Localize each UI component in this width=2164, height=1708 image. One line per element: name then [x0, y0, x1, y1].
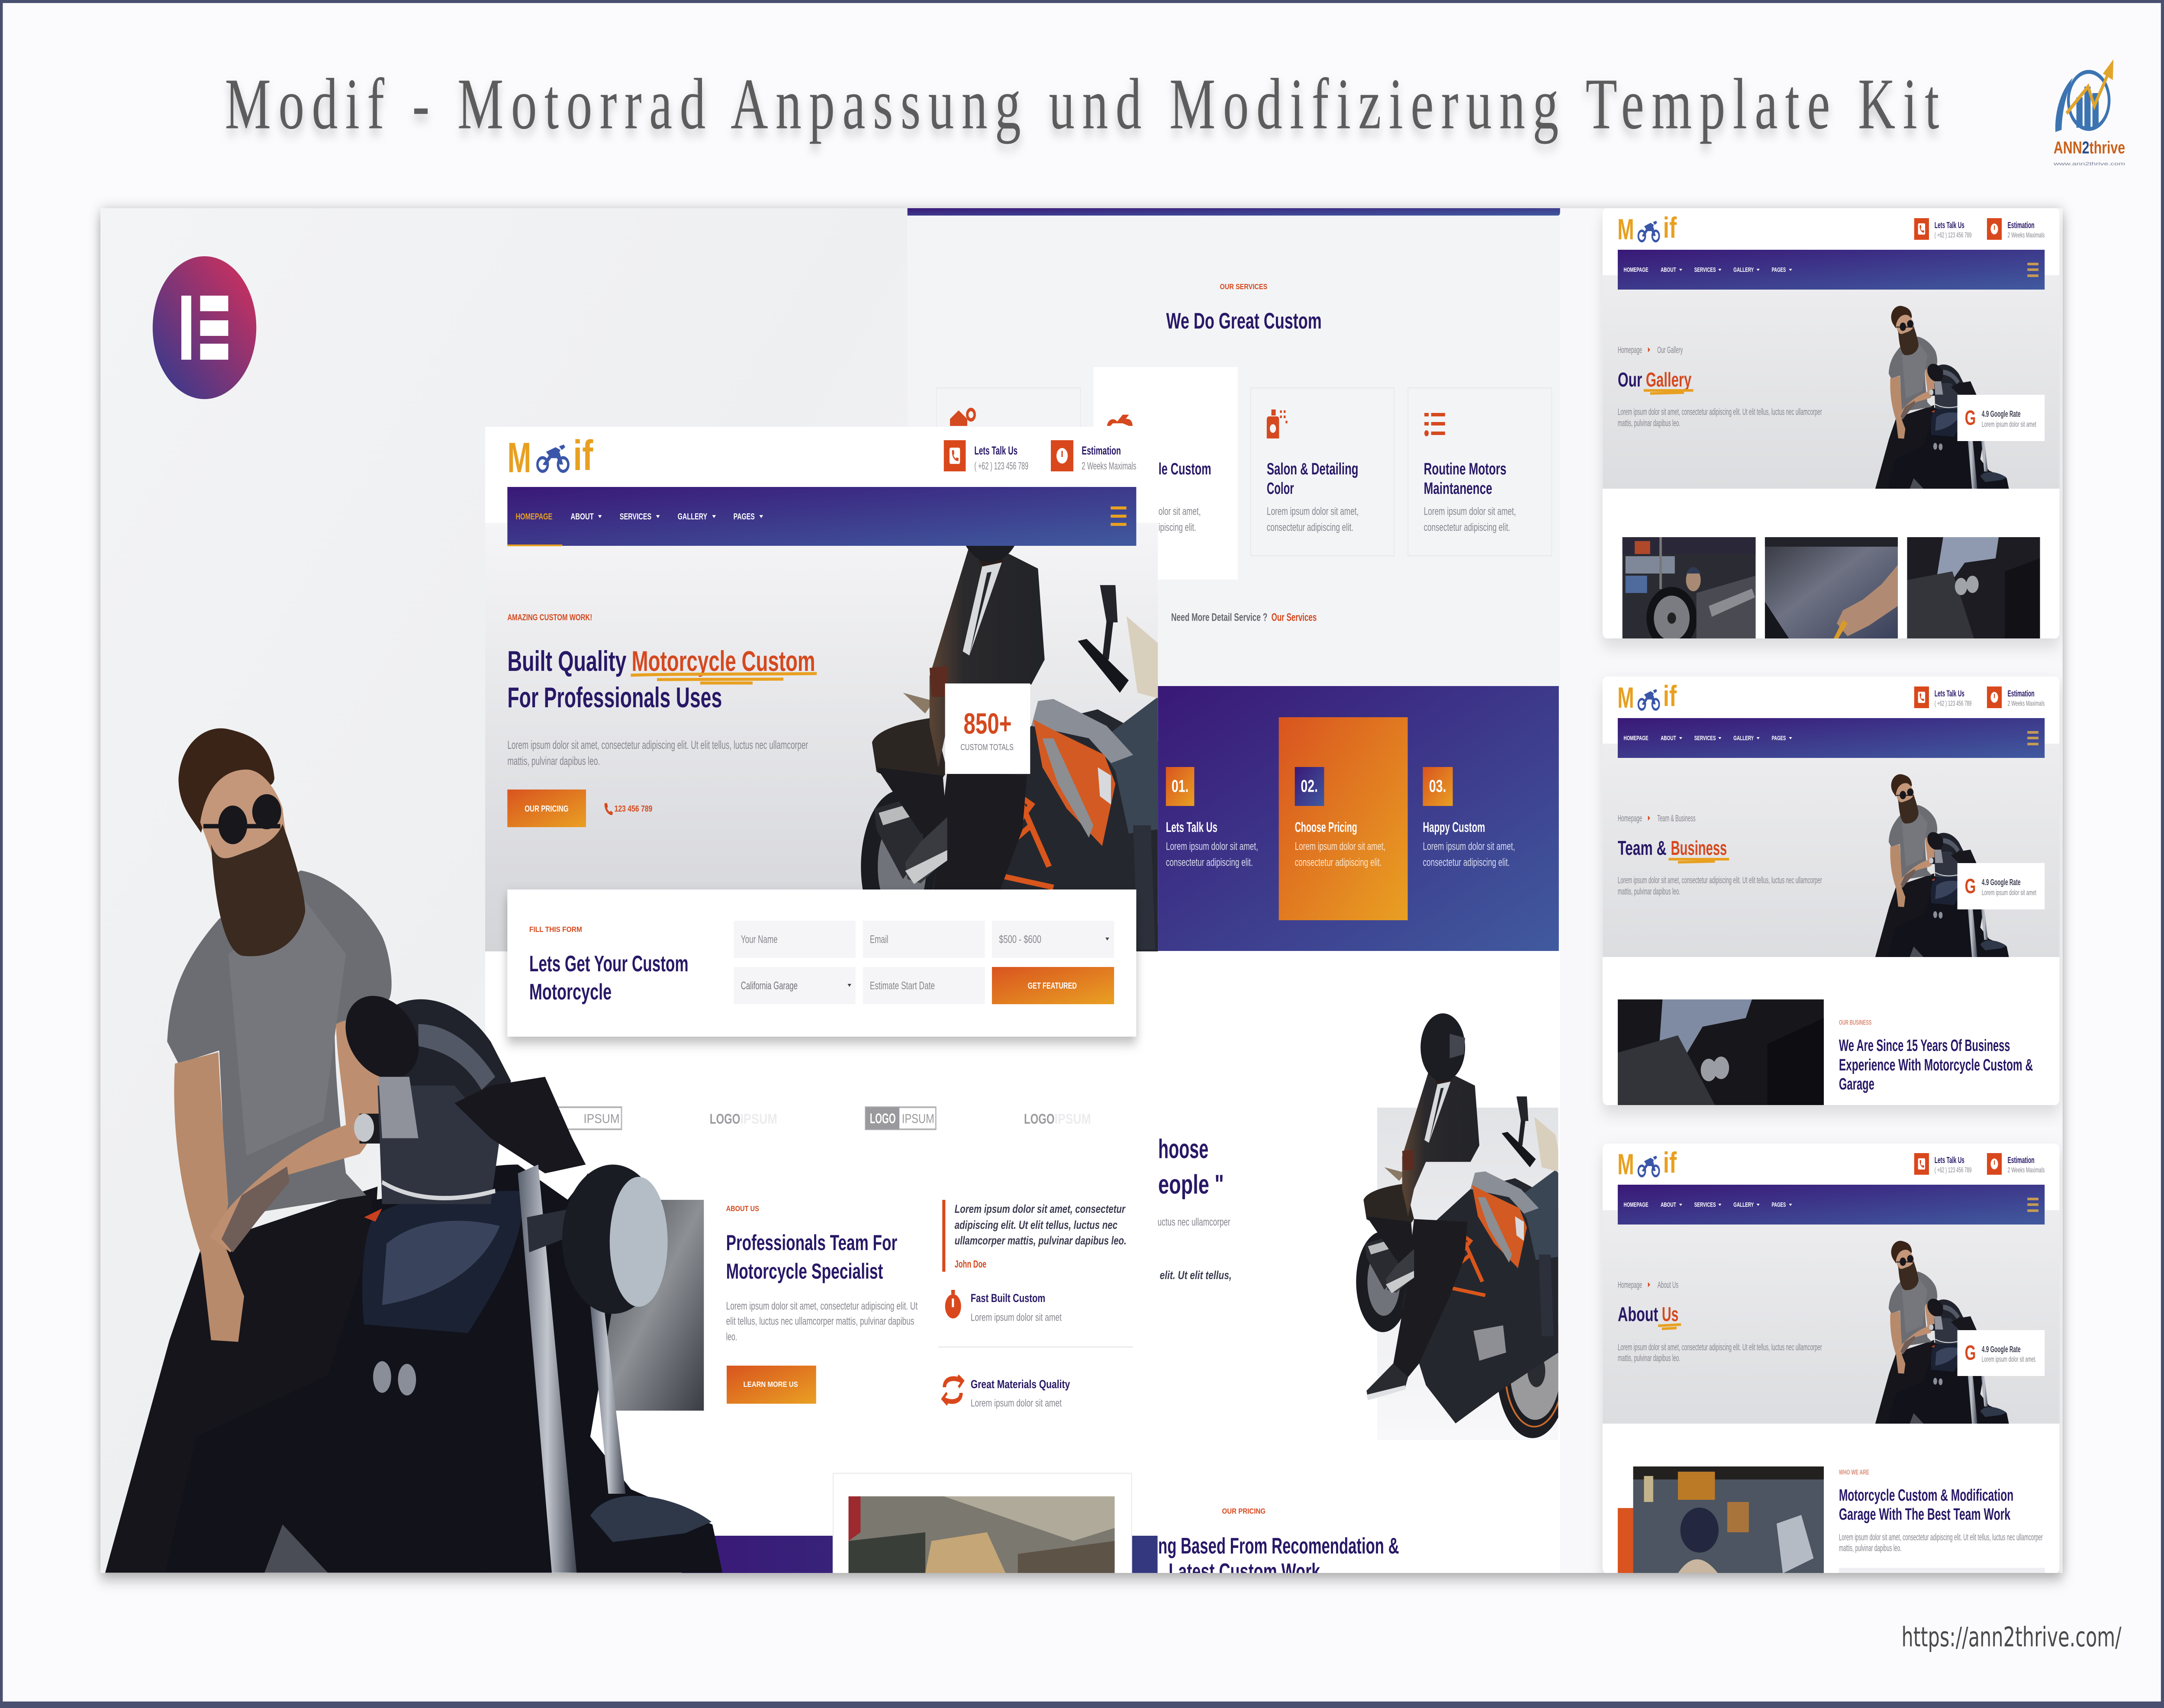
- logo tagline: www.ann2thrive.com: [2053, 161, 2125, 167]
- hero background: [1603, 744, 2059, 957]
- google rating card: 4.9 Google Rate: [1982, 1344, 2021, 1354]
- main panel: [100, 208, 2063, 1584]
- page title: Team &: [1618, 838, 1666, 859]
- quote: Lorem ipsum dolor sit amet, consectetur: [955, 1202, 1126, 1215]
- contact: estimation: Estimation: [2008, 220, 2035, 230]
- service text: salon: Lorem ipsum dolor sit amet,: [1267, 505, 1359, 517]
- about text: elit tellus, luctus nec ullamcorper mattis, pulvinar dapibus: [726, 1315, 914, 1327]
- feature: fast built custom: [945, 1290, 1062, 1323]
- breadcrumb: [1618, 813, 1695, 823]
- image: bearded man: [1875, 306, 2009, 489]
- step 02: consectetur adipiscing elit.: [1295, 856, 1382, 868]
- intro text: [1618, 1342, 1822, 1363]
- contact: estimation: 2 Weeks Maximals: [2008, 1167, 2045, 1174]
- step 01: Lorem ipsum dolor sit amet,: [1166, 840, 1258, 852]
- button: get featured: [992, 967, 1114, 1004]
- partner logo 2: IPSUM: [740, 1111, 777, 1127]
- logo: M: [507, 434, 531, 482]
- page title: [1618, 369, 1693, 393]
- about image: engine: [602, 1200, 704, 1411]
- why choose heading fragment: eople ": [1158, 1170, 1224, 1200]
- nav bar: HOMEPAGE: [1623, 266, 1649, 274]
- hero text: [507, 738, 808, 767]
- partner logo 3: LOGO: [870, 1111, 896, 1126]
- page title: [1618, 1304, 1681, 1329]
- nav bar: ABOUT: [1661, 1201, 1676, 1208]
- breadcrumb: Our Gallery: [1657, 345, 1683, 355]
- clipped content strip: [1839, 1568, 2045, 1573]
- input: email: [863, 921, 985, 958]
- panel: about us page screenshot: [1603, 1144, 2059, 1573]
- left column background: [100, 208, 908, 1573]
- pricing heading fragment: ng Based From Recomendation &: [1158, 1533, 1399, 1558]
- section text: mattis, pulvinar dapibus leo.: [1839, 1543, 1902, 1553]
- breadcrumb: About Us: [1658, 1279, 1678, 1290]
- icon: refresh arrows: [943, 1376, 963, 1405]
- google rating card: Lorem ipsum dolor sit amet: [1982, 889, 2036, 897]
- service card 1: [937, 388, 1080, 556]
- nav bar: [1618, 250, 2045, 290]
- logo: [507, 432, 593, 482]
- step 01: consectetur adipiscing elit.: [1166, 856, 1253, 868]
- breadcrumb: Homepage: [1618, 813, 1642, 823]
- contact: phone: ( +62 ) 123 456 789: [1935, 700, 1971, 708]
- hero text: mattis, pulvinar dapibus leo.: [507, 754, 600, 767]
- phone link: [605, 803, 653, 815]
- section heading: [1839, 1486, 2013, 1523]
- contact: phone: Lets Talk Us: [1935, 1155, 1964, 1165]
- input: your name: Your Name: [741, 933, 778, 945]
- partner logo 4: [1024, 1111, 1091, 1127]
- partner logo 2: [710, 1111, 777, 1127]
- intro text: mattis, pulvinar dapibus leo.: [1618, 886, 1681, 896]
- section heading: [1839, 1036, 2033, 1093]
- step 01: Lets Talk Us: [1166, 819, 1217, 835]
- step 02: 02.: [1301, 777, 1318, 796]
- page title: Us: [1662, 1304, 1678, 1325]
- image: motorcycle gauges: [1618, 999, 1824, 1105]
- nav bar: SERVICES: [1694, 734, 1716, 742]
- contact: estimation: [1987, 218, 2045, 240]
- image: mechanic in workshop: [1633, 1466, 1824, 1573]
- feature: great materials quality: [943, 1376, 1070, 1409]
- nav bar: SERVICES: [1694, 266, 1716, 274]
- nav bar: SERVICES: [1694, 1201, 1716, 1208]
- icon: stopwatch: [945, 1290, 961, 1318]
- heading: we do great custom: We Do Great Custom: [1166, 308, 1322, 333]
- contact: estimation: 2 Weeks Maximals: [2008, 700, 2045, 708]
- nav bar: GALLERY: [1733, 734, 1754, 742]
- button: learn more: LEARN MORE US: [744, 1380, 798, 1389]
- image: bearded man: [1875, 1241, 2009, 1424]
- contact: phone: [1914, 218, 1971, 240]
- step 02: Lorem ipsum dolor sit amet,: [1295, 840, 1385, 852]
- logo: M: [1617, 681, 1634, 714]
- nav bar: ABOUT: [570, 511, 594, 522]
- nav bar: PAGES: [1772, 1201, 1786, 1208]
- intro text: [1618, 406, 1822, 428]
- breadcrumb: [1618, 345, 1683, 355]
- service card 3: consectetur adipiscing elit.: [1267, 521, 1353, 533]
- service card 4: [1408, 388, 1552, 556]
- logo: [1617, 211, 1677, 246]
- image: rider on motorcycle: [1356, 1013, 1575, 1438]
- top purple band: [908, 208, 1560, 216]
- eyebrow: our business: OUR BUSINESS: [1839, 1018, 1871, 1026]
- about heading: Professionals Team For: [726, 1231, 897, 1255]
- feature: fast built custom: Fast Built Custom: [971, 1292, 1045, 1305]
- hero background: [485, 523, 1158, 951]
- form heading: Lets Get Your Custom: [529, 951, 689, 976]
- service text: routine: Lorem ipsum dolor sit amet,: [1424, 505, 1516, 517]
- hero heading: Built Quality: [507, 645, 627, 677]
- contact: phone: ( +62 ) 123 456 789: [974, 461, 1028, 472]
- need more detail link: [1171, 611, 1317, 623]
- section heading: Motorcycle Custom & Modification: [1839, 1486, 2013, 1504]
- gap column background: [1559, 208, 2063, 1573]
- logo: if: [573, 432, 593, 480]
- google rating card: Lorem ipsum dolor sit amet: [1982, 420, 2036, 429]
- intro text: mattis, pulvinar dapibus leo.: [1618, 418, 1681, 428]
- eyebrow: our services: OUR SERVICES: [1220, 283, 1267, 291]
- logo: if: [1663, 680, 1677, 712]
- rider backdrop: [1377, 1108, 1558, 1440]
- about heading: Motorcycle Specialist: [726, 1260, 883, 1284]
- logo: [1617, 680, 1677, 714]
- main panel shadow: [100, 208, 2063, 1573]
- step 01: 01.: [1172, 777, 1188, 796]
- stat card: 850+: 850+: [963, 707, 1012, 740]
- feature: fast built custom: Lorem ipsum dolor sit amet: [971, 1312, 1062, 1323]
- pricing heading fragment: Latest Custom Work: [1169, 1559, 1320, 1584]
- eyebrow: amazing custom work: AMAZING CUSTOM WORK!: [507, 612, 592, 622]
- title: Modif - Motorrad Anpassung und Modifizierung Template Kit: [225, 64, 1939, 144]
- logo wordmark: ANN2thrive: [2054, 139, 2125, 158]
- image: bearded man: [1875, 774, 2009, 957]
- nav bar: PAGES: [1772, 734, 1786, 742]
- select: garage: [734, 967, 856, 1004]
- google rating card: [1958, 863, 2045, 909]
- quote: [942, 1200, 1127, 1272]
- need more detail link: Need More Detail Service ?: [1171, 611, 1267, 623]
- why choose heading fragment: [1158, 1134, 1224, 1200]
- nav bar: PAGES: [1772, 266, 1786, 274]
- partner logo 3: [866, 1107, 936, 1129]
- why choose heading fragment: hoose: [1158, 1134, 1208, 1164]
- image: bearded man on motorcycle: [105, 728, 722, 1573]
- service title: salon: Salon & Detailing: [1267, 460, 1359, 478]
- select: garage: California Garage: [741, 980, 798, 992]
- hero heading: Motorcycle Custom: [632, 645, 815, 677]
- panel: homepage screenshot: [485, 427, 1186, 1577]
- quote: adipiscing elit. Ut elit tellus, luctus nec: [955, 1218, 1117, 1231]
- section heading: We Are Since 15 Years Of Business: [1839, 1036, 2010, 1054]
- gallery image: workshop: [1623, 537, 1755, 649]
- google rating card: 4.9 Google Rate: [1982, 409, 2021, 419]
- form heading: Motorcycle: [529, 979, 612, 1004]
- contact: estimation: Estimation: [2008, 688, 2035, 699]
- image: garage interior: [849, 1496, 1115, 1573]
- about heading: [726, 1231, 897, 1284]
- google rating card: 4.9 Google Rate: [1982, 877, 2021, 887]
- divider: [938, 1346, 1133, 1348]
- input: email: Email: [870, 933, 888, 945]
- nav bar: HOMEPAGE: [1623, 734, 1649, 742]
- input: start date: Estimate Start Date: [870, 980, 935, 992]
- google rating card: G: [1965, 406, 1976, 429]
- step 03: Happy Custom: [1423, 819, 1485, 835]
- intro text: Lorem ipsum dolor sit amet, consectetur adipiscing elit. Ut elit tellus, luctus nec ullamcorper: [1618, 406, 1822, 417]
- nav bar: ABOUT: [1661, 734, 1676, 742]
- panel: gallery page screenshot: [1603, 208, 2059, 649]
- contact: phone: Lets Talk Us: [1935, 220, 1964, 230]
- input: start date: [863, 967, 985, 1004]
- icon: motorcycle: [1107, 415, 1133, 426]
- logo: if: [1663, 211, 1677, 244]
- about text: [726, 1300, 918, 1343]
- service card 3: [1251, 388, 1394, 556]
- hero image: rider on motorcycle: [861, 459, 1186, 1104]
- gallery card: [833, 1473, 1132, 1577]
- need more detail link: Our Services: [1272, 611, 1317, 623]
- highlighted step card: [1279, 717, 1408, 920]
- icon: spray bottle: [1267, 409, 1288, 438]
- nav bar: GALLERY: [678, 511, 707, 522]
- contact: phone: [1914, 1153, 1971, 1175]
- section heading: Garage: [1839, 1075, 1874, 1093]
- page title: Our: [1618, 369, 1642, 391]
- form eyebrow: FILL THIS FORM: [529, 925, 582, 934]
- step 02: [1295, 767, 1385, 868]
- section text: Lorem ipsum dolor sit amet, consectetur adipiscing elit. Ut elit tellus, luctus nec ullamcorper: [1839, 1532, 2043, 1542]
- eyebrow: who we are: WHO WE ARE: [1839, 1468, 1869, 1476]
- about text: leo.: [726, 1331, 737, 1343]
- contact: phone: Lets Talk Us: [974, 444, 1018, 457]
- panel: services page: [908, 208, 1575, 1584]
- nav bar: HOMEPAGE: [1623, 1201, 1649, 1208]
- url: https://ann2thrive.com/: [1902, 1621, 2122, 1653]
- section text: [1839, 1532, 2043, 1553]
- pricing heading fragment: [1158, 1533, 1399, 1584]
- nav bar: GALLERY: [1733, 266, 1754, 274]
- contact: estimation: [1987, 686, 2045, 708]
- contact: estimation: 2 Weeks Maximals: [2008, 232, 2045, 239]
- quote: John Doe: [955, 1259, 986, 1270]
- breadcrumb: Team & Business: [1657, 813, 1695, 823]
- stat card: 850+: CUSTOM TOTALS: [960, 742, 1014, 752]
- logo: [1617, 1146, 1677, 1181]
- form heading: [529, 951, 689, 1004]
- contact: phone: [1914, 686, 1971, 708]
- gallery image: gauges: [1907, 537, 2040, 638]
- page title: About: [1618, 1304, 1658, 1325]
- panel: process steps: [1158, 686, 1559, 951]
- logo: M: [1617, 213, 1634, 246]
- select: budget: [992, 921, 1114, 958]
- service card 4: consectetur adipiscing elit.: [1424, 521, 1510, 533]
- service text fragment: olor sit amet,: [1159, 505, 1201, 517]
- step 03: [1423, 767, 1515, 868]
- icon: house and gear: [950, 409, 975, 426]
- gallery image: hand with tool: [1765, 537, 1898, 638]
- eyebrow: our pricing: OUR PRICING: [1222, 1507, 1266, 1516]
- page title: Business: [1671, 838, 1727, 859]
- section heading: Experience With Motorcycle Custom &: [1839, 1056, 2033, 1074]
- nav bar: SERVICES: [620, 511, 651, 522]
- page title: Gallery: [1646, 369, 1691, 391]
- contact: phone: ( +62 ) 123 456 789: [1935, 232, 1971, 239]
- button: learn more: [727, 1366, 816, 1404]
- stat card: 850+: [945, 683, 1030, 774]
- partner logo 1: [551, 1107, 622, 1129]
- service title: routine: Routine Motors: [1424, 460, 1507, 478]
- step 03: 03.: [1429, 777, 1446, 796]
- icon: checklist: [1424, 413, 1445, 436]
- intro text: [1618, 875, 1822, 896]
- google rating card: G: [1965, 1341, 1976, 1364]
- partner logo 1: IPSUM: [583, 1111, 620, 1126]
- why choose text fragment: uctus nec ullamcorper: [1158, 1216, 1230, 1228]
- nav bar: [1618, 1185, 2045, 1225]
- nav bar: HOMEPAGE: [516, 511, 552, 522]
- ANN2thrive logo: [2053, 59, 2125, 167]
- service card 2: [1093, 367, 1238, 580]
- service card 4: Maintanence: [1424, 479, 1492, 497]
- logo: M: [1617, 1148, 1634, 1181]
- contact: phone: ( +62 ) 123 456 789: [1935, 1167, 1971, 1174]
- google rating card: G: [1965, 874, 1976, 898]
- contact: phone: [944, 440, 1028, 472]
- button: get featured: GET FEATURED: [1028, 980, 1077, 991]
- nav bar: [1618, 718, 2045, 758]
- nav bar: GALLERY: [1733, 1201, 1754, 1208]
- nav bar: ABOUT: [1661, 266, 1676, 274]
- feature: great materials quality: Great Materials Quality: [971, 1378, 1070, 1391]
- nav bar: [507, 487, 1136, 546]
- feature: great materials quality: Lorem ipsum dolor sit amet: [971, 1398, 1062, 1409]
- about eyebrow: ABOUT US: [726, 1205, 759, 1213]
- hero background: [1603, 1210, 2059, 1424]
- button: our pricing: OUR PRICING: [525, 803, 568, 814]
- hero background: [1603, 275, 2059, 489]
- google rating card: [1958, 395, 2045, 441]
- breadcrumb: [1618, 1279, 1678, 1290]
- orange accent block: [1618, 1508, 1633, 1573]
- panel: team and business page screenshot: [1603, 677, 2059, 1105]
- button: our pricing: [507, 790, 586, 827]
- intro text: Lorem ipsum dolor sit amet, consectetur adipiscing elit. Ut elit tellus, luctus nec ullamcorper: [1618, 875, 1822, 885]
- partner logo 3: IPSUM: [902, 1111, 934, 1126]
- breadcrumb: Homepage: [1618, 1279, 1642, 1290]
- contact: estimation: 2 Weeks Maximals: [1082, 461, 1136, 472]
- elementor badge: [153, 256, 256, 399]
- hero heading: For Professionals Uses: [507, 682, 722, 714]
- purple band at bottom: [682, 1536, 1158, 1573]
- breadcrumb: Homepage: [1618, 345, 1642, 355]
- step 01: [1166, 767, 1258, 868]
- nav bar: PAGES: [734, 511, 755, 522]
- page title: [1618, 838, 1729, 862]
- form card: [507, 889, 1136, 1037]
- google rating card: [1958, 1330, 2045, 1376]
- contact: estimation: Estimation: [1082, 444, 1121, 457]
- partner logo 2: LOGO: [710, 1111, 740, 1127]
- select: budget: $500 - $600: [999, 933, 1041, 945]
- service title fragment: le Custom: [1159, 460, 1211, 478]
- step 03: Lorem ipsum dolor sit amet,: [1423, 840, 1515, 852]
- service card 2: ipiscing elit.: [1159, 521, 1196, 533]
- intro text: mattis, pulvinar dapibus leo.: [1618, 1353, 1681, 1363]
- intro text: Lorem ipsum dolor sit amet, consectetur adipiscing elit. Ut elit tellus, luctus nec ullamcorper: [1618, 1342, 1822, 1352]
- service card 3: Color: [1267, 479, 1294, 497]
- contact: estimation: [1987, 1153, 2045, 1175]
- services background: [908, 216, 1560, 687]
- input: your name: [734, 921, 856, 958]
- contact: estimation: [1051, 440, 1136, 472]
- hero heading: [507, 645, 817, 714]
- phone link: 123 456 789: [615, 803, 653, 814]
- quote: ullamcorper mattis, pulvinar dapibus leo.: [955, 1234, 1127, 1247]
- logo icon: swoosh and arrow: [2055, 59, 2113, 132]
- section heading: Garage With The Best Team Work: [1839, 1505, 2011, 1523]
- contact: estimation: Estimation: [2008, 1155, 2035, 1165]
- hero text: Lorem ipsum dolor sit amet, consectetur adipiscing elit. Ut elit tellus, luctus nec ullamcorper: [507, 738, 808, 751]
- step 03: consectetur adipiscing elit.: [1423, 856, 1510, 868]
- brush underline: [631, 674, 817, 683]
- logo: if: [1663, 1146, 1677, 1179]
- contact: phone: Lets Talk Us: [1935, 688, 1964, 699]
- partner logo 4: IPSUM: [1055, 1111, 1091, 1127]
- about text: Lorem ipsum dolor sit amet, consectetur adipiscing elit. Ut: [726, 1300, 918, 1312]
- step 02: Choose Pricing: [1295, 819, 1357, 835]
- why choose bold fragment: elit. Ut elit tellus,: [1160, 1269, 1232, 1282]
- partner logo 4: LOGO: [1024, 1111, 1055, 1127]
- google rating card: Lorem ipsum dolor sit amet.: [1982, 1355, 2036, 1364]
